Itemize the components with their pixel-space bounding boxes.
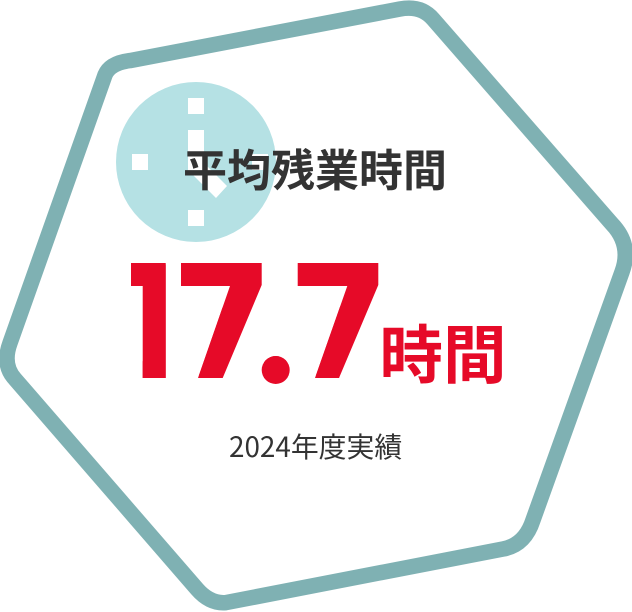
heading: 平均残業時間 <box>183 147 447 196</box>
caption: 2024年度実績 <box>229 426 402 466</box>
value: 1 <box>106 229 198 413</box>
value <box>131 263 378 384</box>
unit: 時間 <box>380 322 506 392</box>
icon: clock <box>116 82 276 242</box>
value: . <box>253 229 299 413</box>
value: 7 <box>292 229 384 413</box>
value: 7 <box>175 229 267 413</box>
